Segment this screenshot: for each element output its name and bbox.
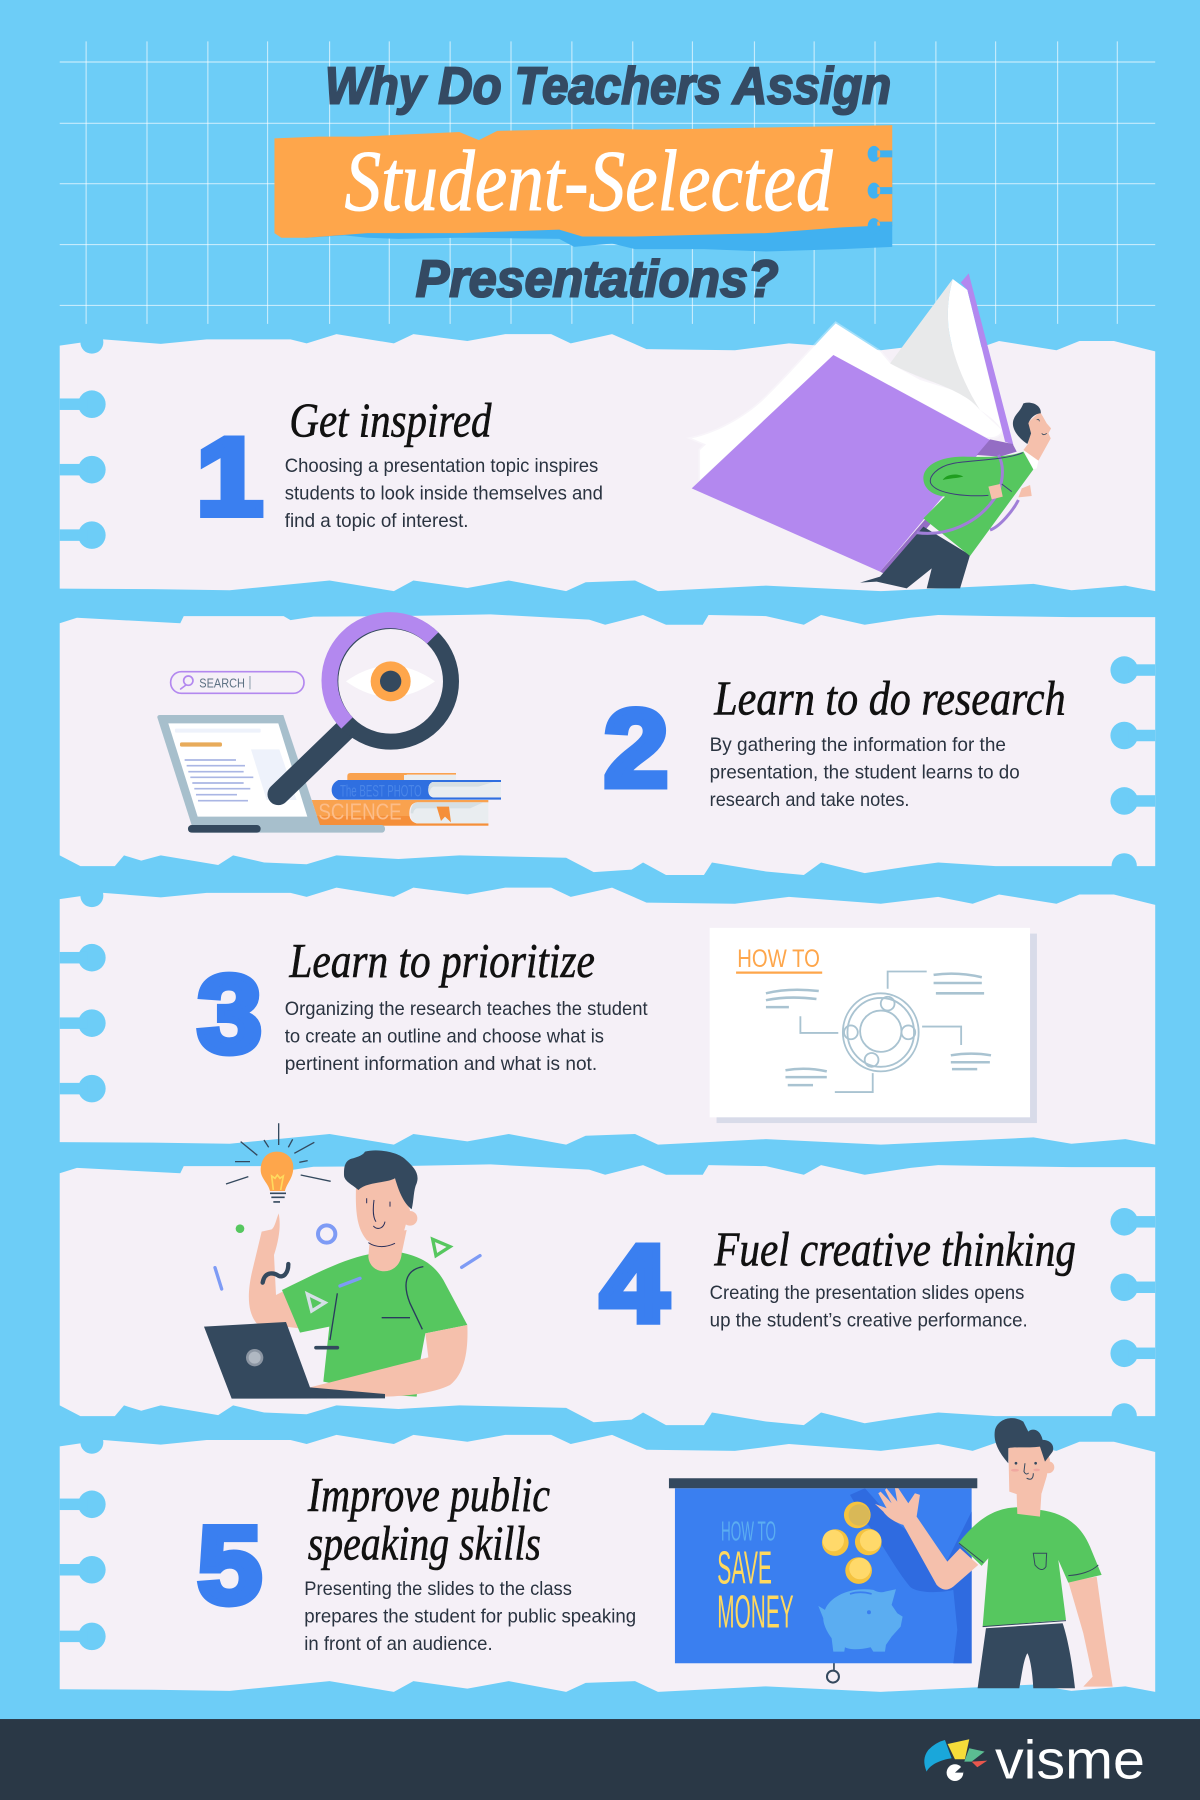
visme logo xyxy=(924,1729,1145,1790)
title line 1: Why Do Teachers Assign xyxy=(325,56,891,114)
panel 4: fuel creative thinking xyxy=(60,1123,1155,1429)
body text: prepares the student for public speaking xyxy=(304,1606,636,1628)
projection screen: MONEY xyxy=(717,1585,794,1637)
light bulb xyxy=(226,1123,331,1202)
footer bar xyxy=(0,1719,1200,1800)
illustration: laptop, magnifier and books xyxy=(157,620,501,833)
panel 3: learn to prioritize xyxy=(60,884,1155,1145)
illustration: student with idea and laptop xyxy=(204,1123,480,1399)
visme logo: visme xyxy=(995,1729,1145,1790)
body text: students to look inside themselves and xyxy=(285,483,603,505)
heading: Learn to do research xyxy=(713,672,1066,725)
laptop xyxy=(204,1322,385,1399)
heading: Get inspired xyxy=(289,394,492,447)
shirt and body xyxy=(282,1253,467,1397)
body text xyxy=(304,1578,636,1655)
search box: SEARCH xyxy=(199,676,245,690)
laptop xyxy=(157,715,385,833)
illustration: how-to whiteboard: HOW TO xyxy=(737,945,820,973)
books: SCIENCE xyxy=(318,798,402,824)
projection screen: HOW TO xyxy=(721,1516,776,1547)
heading: speaking skills xyxy=(308,1517,541,1570)
body text: up the student’s creative performance. xyxy=(710,1309,1028,1331)
body text xyxy=(285,455,603,532)
body text: By gathering the information for the xyxy=(710,734,1006,756)
body text: Choosing a presentation topic inspires xyxy=(285,455,598,477)
number 2: 2 xyxy=(604,688,668,810)
number 3: 3 xyxy=(198,954,262,1076)
body text: pertinent information and what is not. xyxy=(285,1053,597,1075)
squiggle xyxy=(263,1264,288,1283)
number 1: 1 xyxy=(196,416,263,538)
body text: in front of an audience. xyxy=(304,1633,493,1655)
panel 2: learn to do research xyxy=(60,614,1155,878)
banner text: Student-Selected xyxy=(344,132,833,229)
search box xyxy=(171,672,304,693)
heading: Fuel creative thinking xyxy=(713,1223,1076,1276)
title block xyxy=(274,56,892,307)
heading xyxy=(307,1469,550,1570)
body text: presentation, the student learns to do xyxy=(710,762,1020,784)
body text xyxy=(285,998,648,1075)
panel 1: get inspired xyxy=(60,273,1155,591)
heading: Learn to prioritize xyxy=(289,935,595,988)
illustration: presenter with projection screen xyxy=(669,1418,1113,1688)
projection screen: SAVE xyxy=(717,1541,772,1593)
piggy bank xyxy=(818,1589,903,1652)
body text: research and take notes. xyxy=(710,789,909,811)
body text: to create an outline and choose what is xyxy=(285,1026,604,1048)
torn orange banner xyxy=(274,125,892,251)
confetti shapes xyxy=(215,1224,480,1311)
presenter xyxy=(875,1418,1113,1688)
heading: Improve public xyxy=(307,1469,550,1522)
coins xyxy=(822,1502,882,1584)
body text: Creating the presentation slides opens xyxy=(710,1282,1025,1304)
illustration: student carrying giant book xyxy=(692,273,1051,588)
body text: Organizing the research teaches the student xyxy=(285,998,648,1020)
body text: find a topic of interest. xyxy=(285,510,469,532)
magnifying glass with eye xyxy=(278,620,451,794)
panel 5: improve public speaking skills xyxy=(60,1418,1155,1692)
body text: Presenting the slides to the class xyxy=(304,1578,572,1600)
number 4: 4 xyxy=(601,1224,669,1346)
projection screen xyxy=(669,1478,977,1683)
illustration: how-to whiteboard xyxy=(710,928,1037,1123)
books: The BEST PHOTO xyxy=(340,782,422,801)
raised arm xyxy=(249,1213,300,1328)
body text xyxy=(710,734,1020,811)
number 5: 5 xyxy=(198,1505,262,1627)
body text xyxy=(710,1282,1028,1331)
title line 3: Presentations? xyxy=(416,249,779,307)
books xyxy=(312,773,501,826)
